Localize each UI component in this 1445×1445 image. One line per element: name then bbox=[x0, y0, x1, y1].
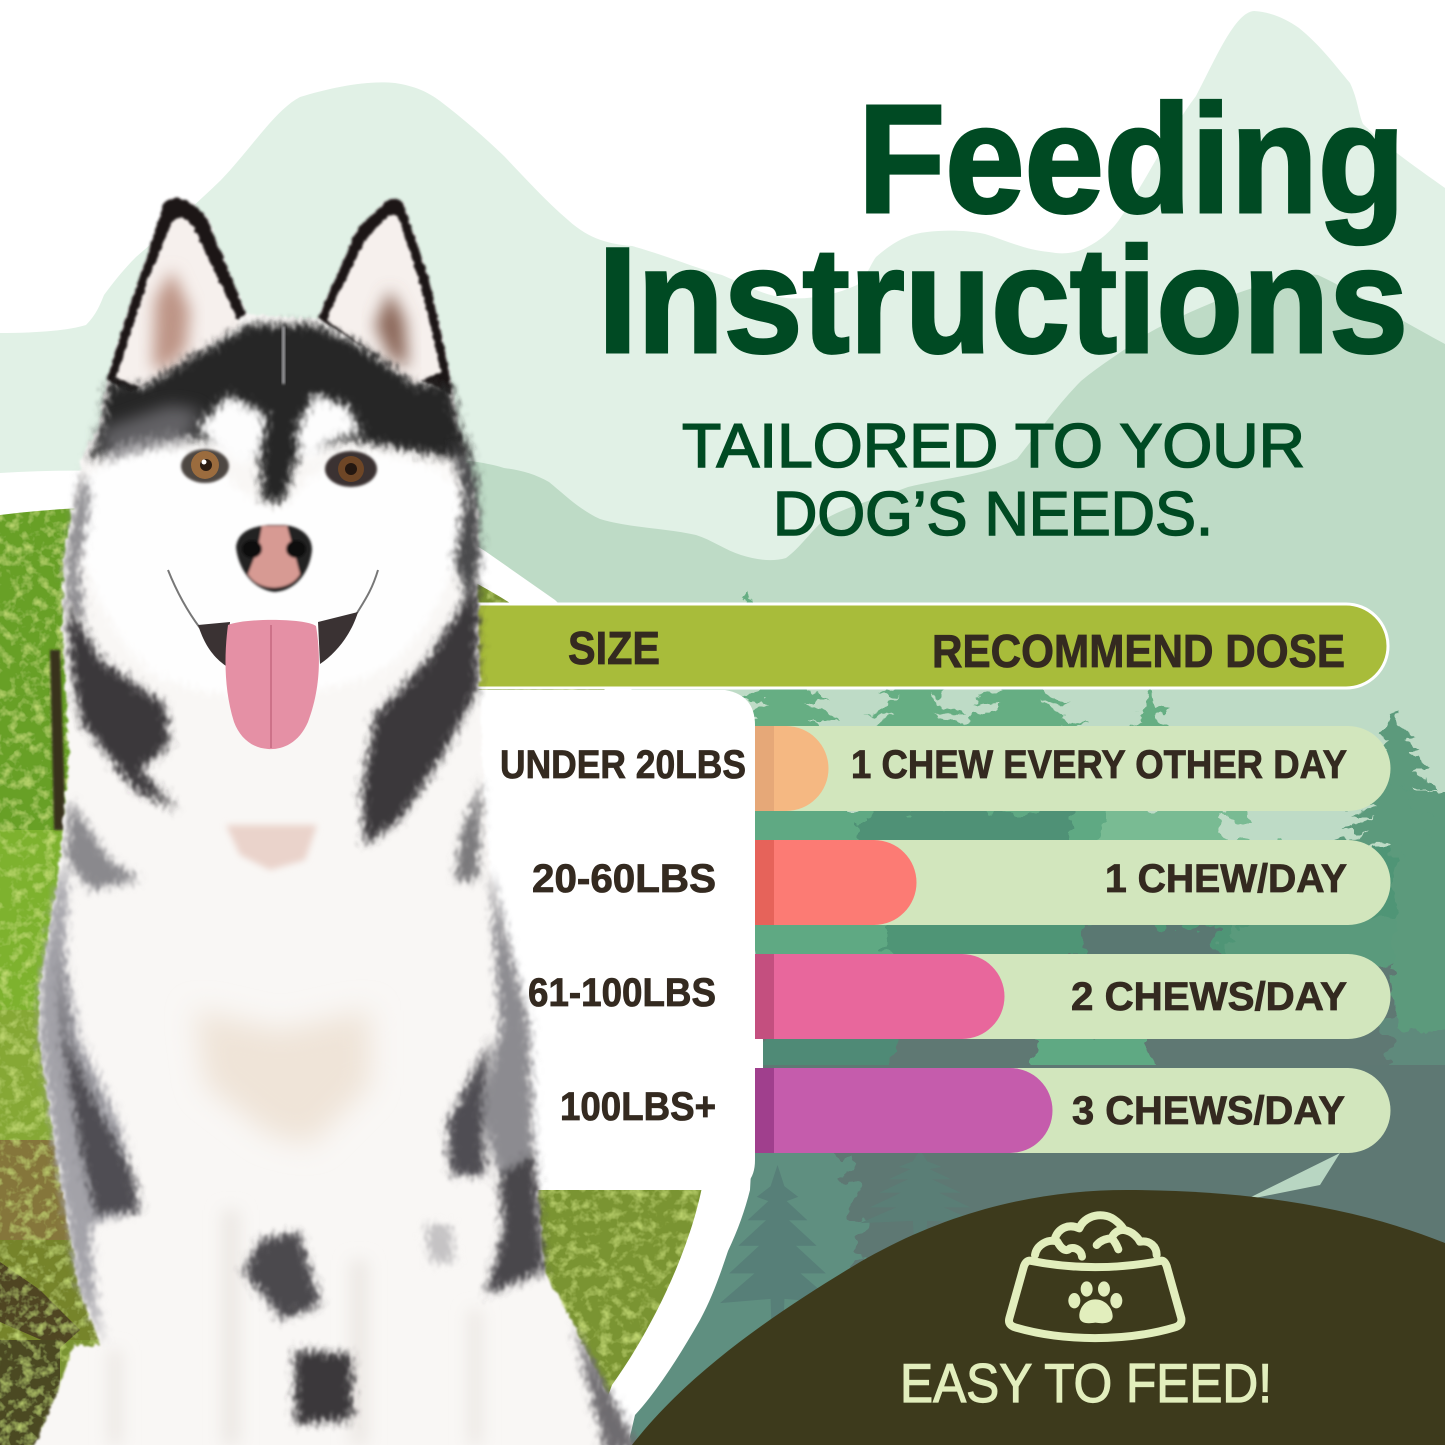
row 1: 1 CHEW EVERY OTHER DAY bbox=[851, 743, 1347, 787]
face white bbox=[81, 449, 461, 696]
tree band light bbox=[755, 811, 1282, 840]
row 4: 3 CHEWS/DAY bbox=[1072, 1089, 1345, 1133]
dark mask bbox=[88, 324, 474, 502]
forest layers bbox=[600, 590, 1445, 1445]
size labels: 61-100LBS bbox=[528, 971, 716, 1015]
tree band mid bbox=[755, 845, 1400, 968]
table white panel bbox=[440, 690, 755, 1190]
mouth bbox=[168, 570, 378, 666]
easy to feed dome bbox=[632, 1190, 1445, 1445]
dose rows bbox=[755, 726, 1390, 1153]
nose bbox=[236, 525, 312, 592]
title bbox=[598, 73, 1408, 384]
neck dark markings bbox=[66, 580, 482, 890]
chest bbox=[108, 825, 482, 1445]
foliage bbox=[0, 500, 720, 1445]
photo background bbox=[0, 500, 720, 1445]
lower slate forest bbox=[600, 1065, 1445, 1445]
tree band top bbox=[742, 590, 1170, 726]
mountains background bbox=[0, 11, 1445, 960]
subtitle: DOG’S NEEDS. bbox=[773, 480, 1213, 549]
table header bar bbox=[440, 604, 1388, 688]
ears bbox=[107, 198, 452, 395]
size labels: 20-60LBS bbox=[532, 857, 716, 901]
right edge tree bbox=[1330, 712, 1445, 1030]
white arc bbox=[0, 471, 763, 1445]
eyes bbox=[181, 449, 377, 487]
tree band dark bbox=[762, 964, 1445, 1065]
row 3 bbox=[755, 954, 1390, 1039]
row 3: 2 CHEWS/DAY bbox=[1071, 975, 1347, 1019]
tree trunk bbox=[50, 650, 66, 830]
icon: food bowl bbox=[1009, 1215, 1181, 1338]
row 2 bbox=[755, 840, 1390, 925]
subtitle: TAILORED TO YOUR bbox=[682, 412, 1305, 481]
header labels bbox=[568, 622, 1345, 677]
title: Instructions bbox=[598, 216, 1408, 384]
face grey sides bbox=[66, 440, 480, 620]
title: Feeding bbox=[858, 73, 1405, 245]
subtitle bbox=[682, 412, 1305, 549]
header labels: SIZE bbox=[568, 622, 660, 674]
size labels: UNDER 20LBS bbox=[500, 743, 746, 787]
caption: EASY TO FEED! bbox=[900, 1352, 1272, 1414]
row 1 bbox=[755, 726, 1390, 811]
row 2: 1 CHEW/DAY bbox=[1105, 857, 1347, 901]
body markings bbox=[40, 860, 640, 1445]
row 4 bbox=[755, 1068, 1390, 1153]
size labels bbox=[500, 743, 746, 1129]
header labels: RECOMMEND DOSE bbox=[932, 625, 1345, 677]
dog photo bbox=[20, 198, 650, 1445]
tongue bbox=[226, 620, 319, 749]
dog body silhouette bbox=[20, 198, 650, 1445]
size labels: 100LBS+ bbox=[560, 1085, 716, 1129]
